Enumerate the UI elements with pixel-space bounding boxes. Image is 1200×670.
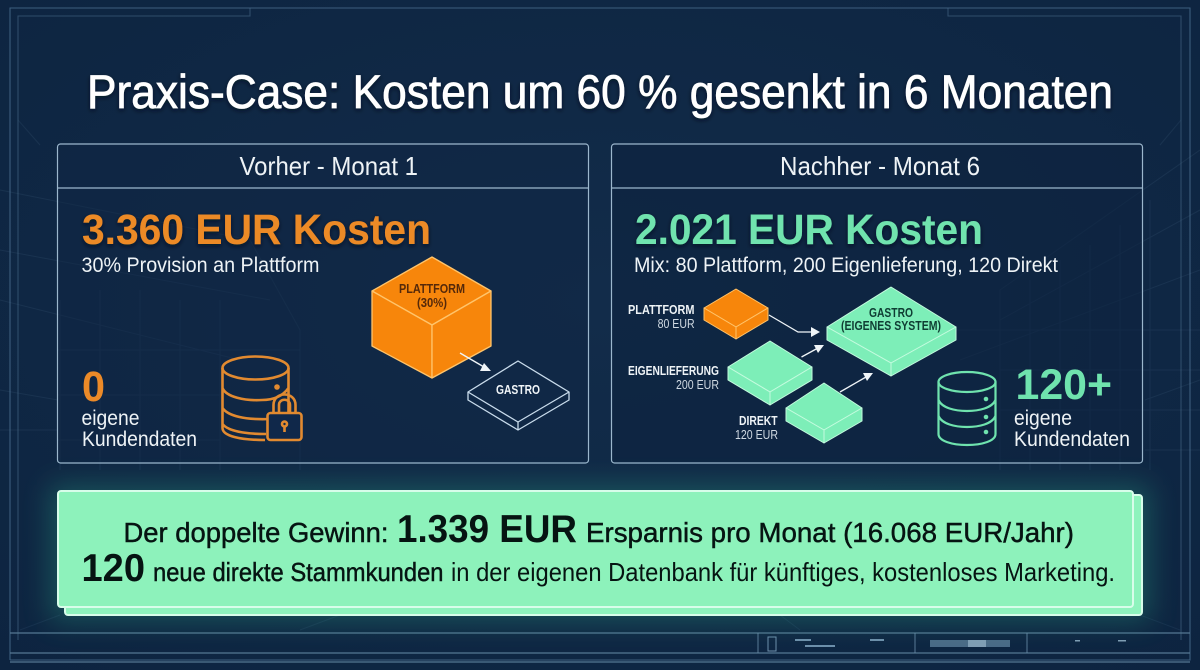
callout line 1: Ersparnis pro Monat (16.068 EUR/Jahr) — [586, 517, 1074, 548]
callout line 2 — [82, 547, 1115, 590]
block: plattform — [704, 289, 768, 339]
customer data count: 120+: eigene — [1014, 406, 1072, 430]
arrow: plattform to gastro — [769, 315, 820, 337]
label: direkt 120 eur: 120 EUR — [735, 428, 778, 442]
arrow: platform to gastro — [460, 353, 491, 371]
arrow: eigenlieferung to gastro — [802, 345, 824, 357]
customer data count: zero: Kundendaten — [82, 427, 197, 451]
block: gastro eigenes system: (EIGENES SYSTEM) — [841, 318, 941, 333]
icon: database with lock — [222, 356, 302, 440]
label: plattform 80 eur: 80 EUR — [658, 317, 695, 331]
customer data count: zero: 0 — [82, 363, 105, 411]
cost figure: nachher: 2.021 EUR Kosten — [635, 206, 983, 254]
bottom status band — [10, 633, 1190, 662]
block: gastro eigenes system — [827, 287, 956, 376]
label: eigenlieferung 200 eur: 200 EUR — [676, 378, 719, 392]
block: gastro eigenes system: GASTRO — [869, 305, 913, 320]
icon: database — [938, 372, 996, 445]
cost figure: vorher: 3.360 EUR Kosten — [82, 206, 431, 254]
customer data count: zero — [82, 363, 197, 451]
customer data count: 120+: Kundendaten — [1014, 427, 1130, 451]
label: direkt 120 eur: DIREKT — [739, 414, 778, 428]
customer data count: zero: eigene — [82, 406, 140, 430]
label: eigenlieferung 200 eur — [628, 364, 719, 392]
arrow: direkt to gastro — [840, 373, 873, 392]
block: direkt — [786, 383, 862, 443]
diagram: gastro block — [468, 361, 569, 430]
callout: doppelter Gewinn — [50, 485, 1150, 621]
callout line 1 — [124, 508, 1074, 551]
label: direkt 120 eur — [735, 414, 778, 442]
panel: vorher — [58, 144, 588, 463]
panel frame: vorher — [58, 144, 588, 463]
subtitle: provision: 30% Provision an Plattform — [82, 253, 320, 277]
callout line 2: neue direkte Stammkunden — [153, 557, 444, 587]
title: Praxis-Case: Kosten um 60 % gesenkt in 6 Monaten — [87, 66, 1113, 119]
label: plattform 80 eur — [628, 303, 695, 331]
callout line 1: 1.339 EUR — [397, 508, 577, 551]
callout line 1: Der doppelte Gewinn: — [124, 517, 388, 548]
panel heading: nachher: Nachher - Monat 6 — [780, 151, 980, 181]
label: eigenlieferung 200 eur: EIGENLIEFERUNG — [628, 364, 719, 378]
panel frame: nachher — [612, 144, 1142, 463]
label: plattform 80 eur: PLATTFORM — [628, 303, 694, 317]
diagram: platform cube: (30%) — [417, 296, 447, 310]
diagram: gastro block: GASTRO — [496, 383, 540, 397]
customer data count: 120+: 120+ — [1016, 361, 1112, 409]
block: eigenlieferung — [728, 341, 812, 405]
diagram: platform cube: PLATTFORM — [399, 282, 465, 296]
callout line 2: in der eigenen Datenbank für künftiges, kostenloses Marketing. — [451, 557, 1115, 587]
subtitle: mix: Mix: 80 Plattform, 200 Eigenlieferung, 120 Direkt — [634, 253, 1058, 277]
panel heading: vorher: Vorher - Monat 1 — [240, 151, 418, 181]
diagram: platform cube — [372, 257, 491, 378]
panel: nachher — [612, 144, 1142, 463]
customer data count: 120+ — [1014, 361, 1130, 451]
callout line 2: 120 — [82, 547, 145, 590]
